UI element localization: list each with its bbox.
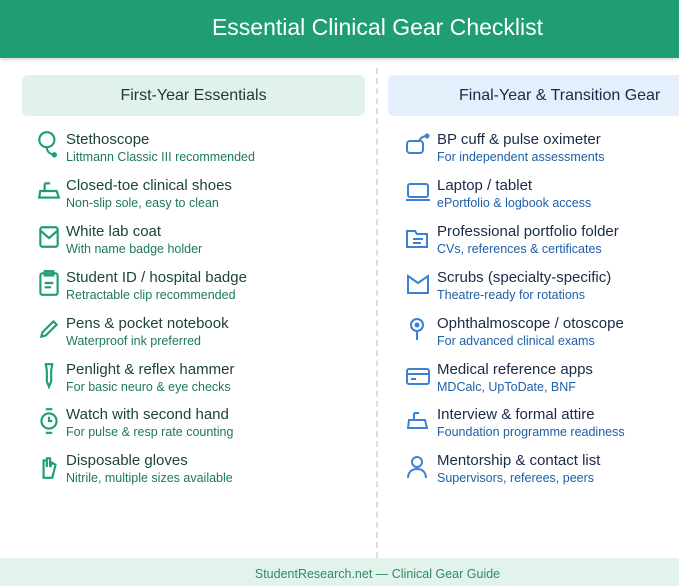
item: watch xyxy=(40,406,233,439)
panel: first-year list xyxy=(38,131,255,485)
panel: final-year list: Ophthalmoscope / otoscope xyxy=(437,315,624,332)
panel: first-year list: Stethoscope xyxy=(66,131,149,148)
divider xyxy=(376,68,378,558)
panel: first-year list: Closed-toe clinical shoes xyxy=(66,177,232,194)
panel: final-year list xyxy=(406,131,625,485)
panel header: final-year: Final-Year & Transition Gear xyxy=(459,87,660,104)
panel header: first-year: First-Year Essentials xyxy=(120,87,267,104)
item: apps xyxy=(406,361,593,394)
item: lab coat xyxy=(39,223,202,256)
panel: first-year list: Disposable gloves xyxy=(66,452,188,469)
panel: final-year list: For advanced clinical exams xyxy=(437,334,595,348)
panel: first-year list: Littmann Classic III recommended xyxy=(66,150,255,164)
panel: final-year list: For independent assessments xyxy=(437,150,604,164)
panel: final-year list: Supervisors, referees, peers xyxy=(437,471,594,485)
footer xyxy=(0,558,679,586)
item: mentorship xyxy=(407,452,600,485)
panel: final-year list: Laptop / tablet xyxy=(437,177,532,194)
item: shoes xyxy=(38,177,232,210)
panel: first-year list: Non-slip sole, easy to clean xyxy=(66,196,219,210)
panel: final-year list: Foundation programme readiness xyxy=(437,425,625,439)
panel: final-year list: CVs, references & certificates xyxy=(437,242,602,256)
panel: first-year list: Retractable clip recommended xyxy=(66,288,236,302)
panel: final-year list: MDCalc, UpToDate, BNF xyxy=(437,380,576,394)
panel: first-year list: Student ID / hospital badge xyxy=(66,269,247,286)
panel header: first-year xyxy=(22,75,365,116)
panel: first-year list: Waterproof ink preferred xyxy=(66,334,201,348)
panel: final-year list: Medical reference apps xyxy=(437,361,593,378)
panel: final-year list: Mentorship & contact list xyxy=(437,452,600,469)
item: ID badge xyxy=(39,269,247,302)
panel: final-year list: Theatre-ready for rotations xyxy=(437,288,585,302)
panel: first-year list: White lab coat xyxy=(66,223,161,240)
panel: first-year list: Nitrile, multiple sizes available xyxy=(66,471,233,485)
panel: final-year list: ePortfolio & logbook access xyxy=(437,196,591,210)
panel: first-year list: For basic neuro & eye checks xyxy=(66,380,231,394)
panel: first-year list: For pulse & resp rate counting xyxy=(66,425,233,439)
footer: StudentResearch.net — Clinical Gear Guide xyxy=(255,567,500,581)
panel: first-year list: Watch with second hand xyxy=(66,406,229,423)
item: pens xyxy=(40,315,229,348)
item: attire xyxy=(406,406,625,439)
panel: first-year list: Pens & pocket notebook xyxy=(66,315,229,332)
item: gloves xyxy=(42,452,233,485)
item: ophthalmoscope xyxy=(410,315,624,348)
panel header: final-year xyxy=(388,75,679,116)
item: scrubs xyxy=(407,269,611,302)
panel: final-year list: Professional portfolio folder xyxy=(437,223,619,240)
item: penlight xyxy=(44,361,234,394)
item: laptop xyxy=(406,177,591,210)
header: Essential Clinical Gear Checklist xyxy=(212,14,543,40)
panel: final-year list: Interview & formal attire xyxy=(437,406,595,423)
panel: first-year list: Penlight & reflex hammer xyxy=(66,361,234,378)
header xyxy=(0,0,679,58)
item: stethoscope xyxy=(38,131,255,164)
item: folder xyxy=(406,223,619,256)
panel: final-year list: BP cuff & pulse oximeter xyxy=(437,131,601,148)
item: BP cuff xyxy=(406,131,604,164)
panel: final-year list: Scrubs (specialty-specific) xyxy=(437,269,611,286)
panel: first-year list: With name badge holder xyxy=(66,242,202,256)
